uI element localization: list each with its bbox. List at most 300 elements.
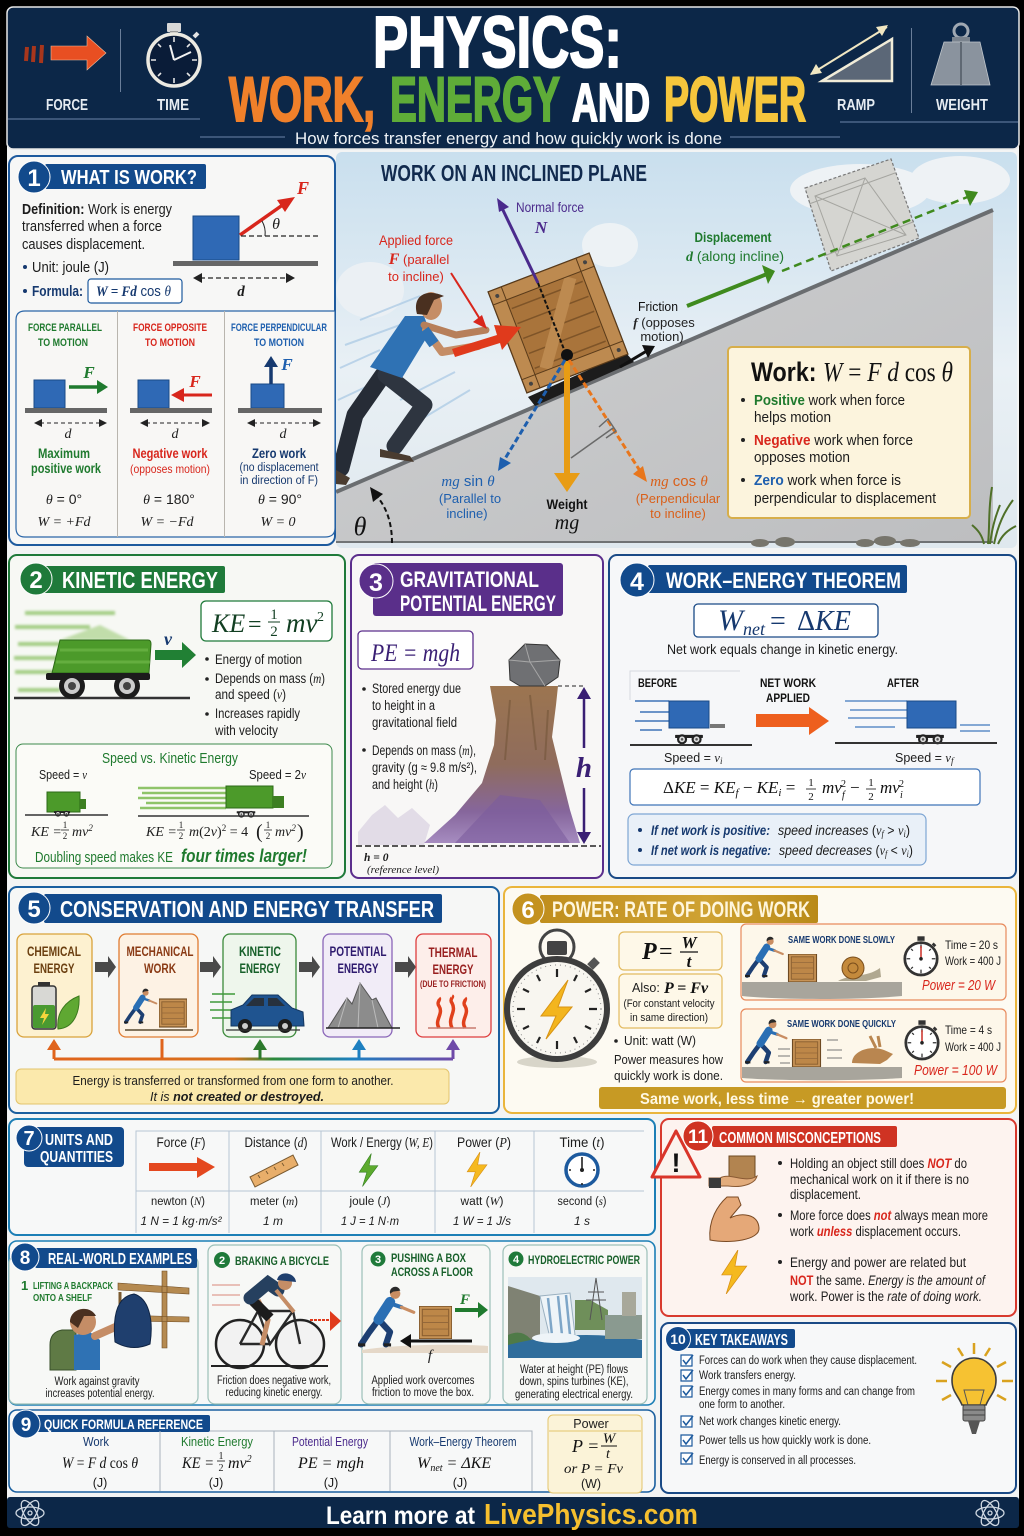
bullets: potential energy: and height (h) [372,777,438,792]
formula table: Work–Energy Theorem [410,1435,516,1449]
checklist [681,1355,917,1467]
arrow: mg cos theta: to incline) [650,506,706,521]
case: parallel [25,322,108,530]
text: unit of power: Power measures how [614,1052,724,1067]
card: fast work: Power = 100 W [914,1063,998,1079]
formula table: net [430,1463,443,1474]
formula box: delta KE: 2 [868,791,874,803]
panel 9: quick formula reference [9,1410,655,1493]
formula table: 1 [218,1451,224,1462]
angle theta [354,487,392,543]
formula table: (J) [93,1476,107,1490]
heading 6 [512,893,818,925]
note: sign of net work: v [901,843,909,859]
formula box: theorem: = [770,606,786,637]
units table: 1 s [574,1214,590,1228]
icon: atom left [16,1498,44,1528]
speed comparison box: 1 [63,820,67,830]
formula box: potential energy: PE = mgh [370,640,460,667]
box: chemical energy [17,934,92,1037]
footer [7,1497,1019,1531]
formula box: delta KE: 2 [841,779,846,790]
formula table: KE [471,1455,491,1472]
note: sign of net work: ) [909,843,913,858]
units table: 1 m [263,1214,283,1228]
case: perpendicular: FORCE PERPENDICULAR [231,322,327,334]
arrow: applied force: Applied force [379,232,453,248]
icon: moving cart [14,613,196,699]
arrow: normal force: Normal force [516,200,584,215]
footer text [326,1499,698,1531]
case: opposite: FORCE OPPOSITE [133,322,207,334]
case: perpendicular: TO MOTION [254,337,304,349]
formula box: P = Fv: Also: [632,981,660,995]
heading 1 [18,161,206,193]
case: parallel: TO MOTION [38,337,88,349]
misconceptions list: mechanical work on it if there is no [790,1172,969,1187]
example 4: hydroelectric: HYDROELECTRIC POWER [528,1253,640,1267]
bullets: kinetic energy: and speed (v) [215,687,286,702]
speed comparison box: 2 [266,831,270,841]
formula box: delta KE: i [778,787,781,799]
card: slow work: Work = 400 J [945,954,1001,968]
example 3: pushing a box: friction to move the box. [372,1387,474,1399]
example 2: braking a bicycle: Friction does negative work, [217,1375,331,1387]
icon: force arrow [26,36,106,114]
example 3: pushing a box: ACROSS A FLOOR [391,1265,473,1279]
formula box: theorem: W [718,604,743,637]
example 3: pushing a box: PUSHING A BOX [391,1251,466,1265]
box: thermal energy: (DUE TO FRICTION) [420,979,486,989]
units table: Distance (d) [244,1135,308,1150]
formula box: kinetic energy [201,601,332,641]
box: thermal energy [416,934,491,1037]
formula box: potential energy [358,631,473,669]
formula box: delta KE: − [850,778,860,797]
arrow: applied force: to incline) [388,269,444,284]
heading 2: 2 [29,567,43,594]
formula table: PE = mgh [297,1455,364,1472]
diagram: before and after: i [720,756,723,766]
footer text: Learn more at [326,1502,476,1530]
note: sign of net work: ) [906,823,910,838]
heading 2 [20,563,225,595]
formula box [88,279,182,303]
formula box: kinetic energy: 2 [270,624,278,640]
icon: weight: WEIGHT [936,97,988,114]
example 3: pushing a box: 3 [375,1254,381,1266]
small cart [25,792,108,817]
diagram: force at angle [173,178,318,300]
diagram: before and after: NET WORK [760,678,817,690]
arrow: mg sin theta: mg sin θ [441,473,495,490]
title: POWER [664,65,806,135]
definition text: transferred when a force [22,219,162,235]
box: chemical energy: CHEMICAL [27,944,81,959]
banner: same work less time [599,1087,1006,1109]
arrow: displacement: d (along incline) [686,248,784,265]
heading 11 [683,1121,897,1151]
diagram: force at angle: θ [272,216,280,233]
icon: warning triangle [652,1131,700,1178]
formula box: delta KE [630,769,980,805]
arrow: mg cos theta: mg cos θ [650,473,708,490]
formula box: P = Fv: in same direction) [630,1012,708,1024]
note: sign of net work: < [887,843,901,858]
heading: inclined plane: WORK ON AN INCLINED PLANE [381,160,647,186]
case: parallel: Maximum [38,446,90,461]
speed comparison box: ) [297,821,304,843]
box: mechanical work: WORK [144,961,176,976]
example 3: pushing a box: Applied work overcomes [372,1375,475,1387]
note: sign of net work: If net work is positive: [651,823,770,838]
bullets: kinetic energy: Depends on mass (m) [215,671,325,686]
misconceptions list: NOT the same. Energy is the amount of [790,1273,986,1288]
bullets: kinetic energy: with velocity [214,723,278,738]
icon: weight [931,24,990,114]
box: mechanical work [119,934,198,1037]
units table: meter (m) [250,1196,298,1208]
formula box: theorem: net [743,619,766,639]
formula table: Potential Energy [292,1435,369,1449]
arrow: applied force [379,232,521,357]
text: unit of power: Unit: watt (W) [624,1033,696,1048]
formula table: 2 [218,1463,224,1474]
example 1: lifting a backpack: LIFTING A BACKPACK [33,1281,114,1292]
formula box: delta KE: − [739,778,757,797]
note: sign of net work: v [898,823,906,839]
box: kinetic energy [210,934,304,1037]
example 4: hydroelectric: down, spins turbines (KE), [520,1376,628,1388]
speed comparison box: ( [256,821,263,843]
speed comparison box: 1 [179,820,183,830]
icon: stopwatch [148,23,200,114]
arrow: displacement [686,190,978,306]
units table: 1 J = 1 N·m [341,1214,399,1228]
case: parallel: positive work [31,461,101,476]
box: mechanical work: MECHANICAL [126,944,194,959]
misconceptions list: Holding an object still does NOT do [790,1156,967,1171]
title [229,3,806,135]
arrow: friction: motion) [640,329,684,344]
title: ENERGY [390,65,560,135]
icon: atom right [976,1498,1004,1528]
heading 5: 5 [27,896,41,923]
icon: energy bolt [359,1154,378,1186]
formula box: kinetic energy: = [248,612,262,638]
definition text: Unit: joule (J) [32,260,109,276]
illustration: cliff and rock: h = 0 [364,852,389,864]
example 1: lifting a backpack: 8 [20,1248,30,1269]
heading 7: QUANTITIES [40,1149,113,1166]
caption: theorem: Net work equals change in kinetic energy. [667,641,898,657]
cart: after [835,701,997,744]
note: sign of net work [628,814,926,865]
text: unit of power: quickly work is done. [614,1068,723,1083]
checklist: Energy is conserved in all processes. [699,1455,856,1467]
formula box: power [619,932,722,971]
formula box: delta KE: 2 [808,791,814,803]
speed comparison box: 1 [266,820,270,830]
formula box: P = Fv: P = Fv [663,980,709,997]
speed comparison box: Speed vs. Kinetic Energy [102,751,239,767]
formula table: Kinetic Energy [181,1435,254,1449]
cart: before [630,701,752,745]
heading 7 [16,1125,124,1167]
diagram: force at angle: F [296,178,309,198]
case: perpendicular: d [280,427,288,442]
icon: stopwatch: TIME [157,97,189,114]
icon: clock [566,1154,598,1186]
callout: work formula: perpendicular to displacement [754,491,936,507]
formula table: mv [228,1455,247,1472]
formula table [62,1431,532,1491]
box: potential energy [323,934,400,1037]
units table: 1 W = 1 J/s [453,1214,511,1228]
example 1: lifting a backpack: REAL-WORLD EXAMPLES [48,1251,192,1268]
case: opposite: TO MOTION [145,337,195,349]
panel 4: work-energy theorem [609,555,1016,878]
ghost crate [805,159,919,271]
example 4: hydroelectric: Water at height (PE) flows [520,1364,628,1376]
note: sign of net work: f [885,849,889,859]
formula box: power: t [687,952,693,971]
panel 1: what is work [9,156,335,545]
case: parallel: F [82,363,95,382]
formula box: delta KE: 1 [808,777,814,789]
title: WORK, [229,65,375,135]
example 1: lifting a backpack: Work against gravity [54,1376,140,1388]
incline wall [336,210,993,547]
panel 3: gravitational potential energy [351,555,603,878]
callout: work formula: Positive work when force [754,393,905,409]
formula box: W = Fd cos θ [96,283,172,300]
formula box: delta KE: mv [880,778,900,797]
bullets: potential energy [362,681,477,792]
formula box: power: P [641,939,657,965]
diagram: before and after: APPLIED [766,693,810,705]
card: slow work: Time = 20 s [945,938,998,952]
case: perpendicular [231,322,327,530]
formula box: P = Fv [619,974,722,1028]
example 2: braking a bicycle: reducing kinetic energy. [226,1387,322,1399]
heading 3: POTENTIAL ENERGY [400,591,556,616]
heading 11: COMMON MISCONCEPTIONS [719,1130,881,1147]
checklist: Net work changes kinetic energy. [699,1416,841,1428]
diagram: before and after: f [951,756,955,766]
diagram: before and after: AFTER [887,678,920,690]
arrow: friction: Friction [638,299,678,314]
example 2: braking a bicycle: 2 [219,1255,225,1267]
case: perpendicular: θ = 90° [258,491,302,508]
speed comparison box: KE = [145,825,177,840]
formula box: delta KE: mv [822,778,842,797]
panel 8: real-world examples [9,1241,655,1405]
units table: newton (N) [151,1196,205,1208]
arrow: net work [756,707,829,735]
heading 5 [18,892,442,924]
formula table: (J) [324,1476,338,1490]
heading 7: UNITS AND [45,1132,113,1149]
icon: hand holding box [709,1156,757,1188]
heading 10 [666,1326,795,1352]
formula table: = Δ [443,1455,471,1472]
arrow [200,956,221,978]
box: potential energy: ENERGY [338,961,378,976]
icon: force arrow [149,1157,215,1178]
units table: watt (W) [459,1196,504,1208]
formula card: power [548,1415,642,1493]
formula card: power: or P = Fv [564,1462,624,1477]
heading 7: 7 [23,1128,35,1150]
speed comparison box: KE = [30,825,62,840]
example 3: pushing a box: f [428,1348,434,1364]
formula card: power: W [603,1431,617,1447]
header banner [7,3,1019,149]
panel 10: key takeaways [661,1323,1016,1493]
card: fast work: Work = 400 J [945,1040,1001,1054]
panel 5: conservation and energy transfer [9,887,499,1113]
title: PHYSICS: [373,3,622,83]
heading 4: WORK–ENERGY THEOREM [666,568,901,593]
person pushing [336,292,486,485]
formula box: power: W [681,933,698,952]
case: opposite: F [188,372,201,391]
icon: flexed arm [710,1197,759,1242]
heading 9: QUICK FORMULA REFERENCE [44,1416,203,1432]
units table: Work / Energy (W, E) [331,1135,433,1150]
diagram: before and after [630,671,997,766]
angle theta: θ [354,512,367,541]
note: conservation: Energy is transferred or transformed from one form to another. [72,1073,394,1088]
diagram: before and after: Speed = v [664,751,720,765]
misconceptions list [778,1156,988,1304]
bullets: kinetic energy: Energy of motion [215,652,302,667]
formula box: delta KE: f [842,790,846,801]
formula box: delta KE: i [900,790,903,801]
arrow [299,956,320,978]
case: perpendicular: in direction of F) [240,475,318,487]
example 4: hydroelectric [503,1245,647,1404]
heading 1: WHAT IS WORK? [61,167,197,189]
checklist: Work transfers energy. [699,1370,796,1382]
arrow [395,956,416,978]
bullets: kinetic energy: Increases rapidly [215,706,300,721]
formula box: delta KE: 2 [899,779,904,790]
icon: power bolt [467,1152,487,1187]
fast cart [138,786,309,818]
units table: Power (P) [457,1135,511,1150]
note: sign of net work: If net work is negative: [651,843,771,858]
subtitle: How forces transfer energy and how quickly work is done [295,129,722,148]
heading 3 [359,563,563,616]
icon: big stopwatch [507,930,607,1068]
arrow: weight [546,349,588,534]
speed comparison box: = 4 [226,825,248,840]
icon: lightning bolt [722,1250,747,1294]
heading 11: 11 [688,1127,708,1148]
callout: work formula: opposes motion [754,450,850,466]
case: opposite: (opposes motion) [130,462,210,476]
note: sign of net work: speed increases (v [778,823,882,838]
note: conservation: It is not created or destroyed. [150,1089,324,1104]
icon: moving cart: v [164,629,173,649]
misconceptions list: Energy and power are related but [790,1255,966,1270]
misconceptions list: displacement. [790,1187,861,1202]
speed comparison box: 2 [179,831,183,841]
heading 10: KEY TAKEAWAYS [695,1332,788,1349]
case: parallel: d [64,427,72,442]
units table: 1 N = 1 kg·m/s² [140,1214,222,1228]
panel 2: kinetic energy [9,555,345,878]
misconceptions list: work. Power is the rate of doing work. [789,1289,982,1304]
units table: second (s) [558,1196,607,1208]
heading 10: 10 [670,1331,686,1347]
heading 9 [12,1410,210,1438]
card: fast work: Time = 4 s [945,1023,992,1037]
box: potential energy: POTENTIAL [330,944,386,959]
formula card: power: (W) [581,1477,601,1491]
arrow: friction: f (opposes [633,315,695,330]
card: fast work: SAME WORK DONE QUICKLY [787,1019,896,1030]
speed comparison box: mv [275,825,291,840]
example 3: pushing a box [358,1245,490,1404]
heading 9: 9 [21,1415,31,1436]
speed comparison box [16,744,332,868]
case: perpendicular: F [280,355,293,374]
speed comparison box: m(2v) [189,825,222,840]
box: chemical energy: ENERGY [34,961,74,976]
formula box: kinetic energy: 2 [317,610,324,625]
diagram: before and after: BEFORE [638,678,677,690]
arrow: mg cos theta [569,360,721,521]
formula box: delta KE: KE [756,778,781,799]
example 1: lifting a backpack [9,1243,198,1404]
panel 7: units and quantities [9,1119,655,1235]
units table: Time (t) [560,1135,604,1150]
example 3: pushing a box: F [459,1292,470,1308]
formula box: delta KE: 1 [868,777,874,789]
note: conservation [16,1069,449,1104]
example 4: hydroelectric: generating electrical energy. [515,1389,633,1401]
arrow: weight: mg [555,512,579,534]
heading 2: KINETIC ENERGY [62,567,218,593]
illustration: cliff and rock [356,644,601,876]
note: sign of net work: > [884,823,898,838]
case: opposite: W = −Fd [140,515,195,530]
bullets: potential energy: gravity (g ≈ 9.8 m/s²), [372,760,477,775]
icon: force arrow: FORCE [46,97,88,114]
example 4: hydroelectric: 4 [513,1254,520,1266]
case: perpendicular: W = 0 [260,515,296,530]
formula box: kinetic energy: 1 [270,607,278,623]
banner: same work less time: Same work, less time → greater power! [640,1091,914,1108]
note: sign of net work: i [907,849,909,859]
formula table: Work [83,1435,110,1449]
formula card: power: P = [571,1436,599,1456]
note: sign of net work: i [904,829,906,839]
definition text: Definition: Work is energy [22,202,173,218]
speed comparison box: Doubling speed makes KE [35,850,173,866]
card: slow work [741,924,1006,1000]
arrow: friction [620,299,695,367]
example 1: lifting a backpack: 1 [21,1278,28,1293]
formula box: P = Fv: (For constant velocity [624,998,715,1010]
title: AND [572,73,650,133]
checklist: Energy comes in many forms and can change from [699,1386,915,1398]
callout: work formula: Work: W = F d cos θ [751,357,953,387]
checklist: one form to another. [699,1399,785,1411]
